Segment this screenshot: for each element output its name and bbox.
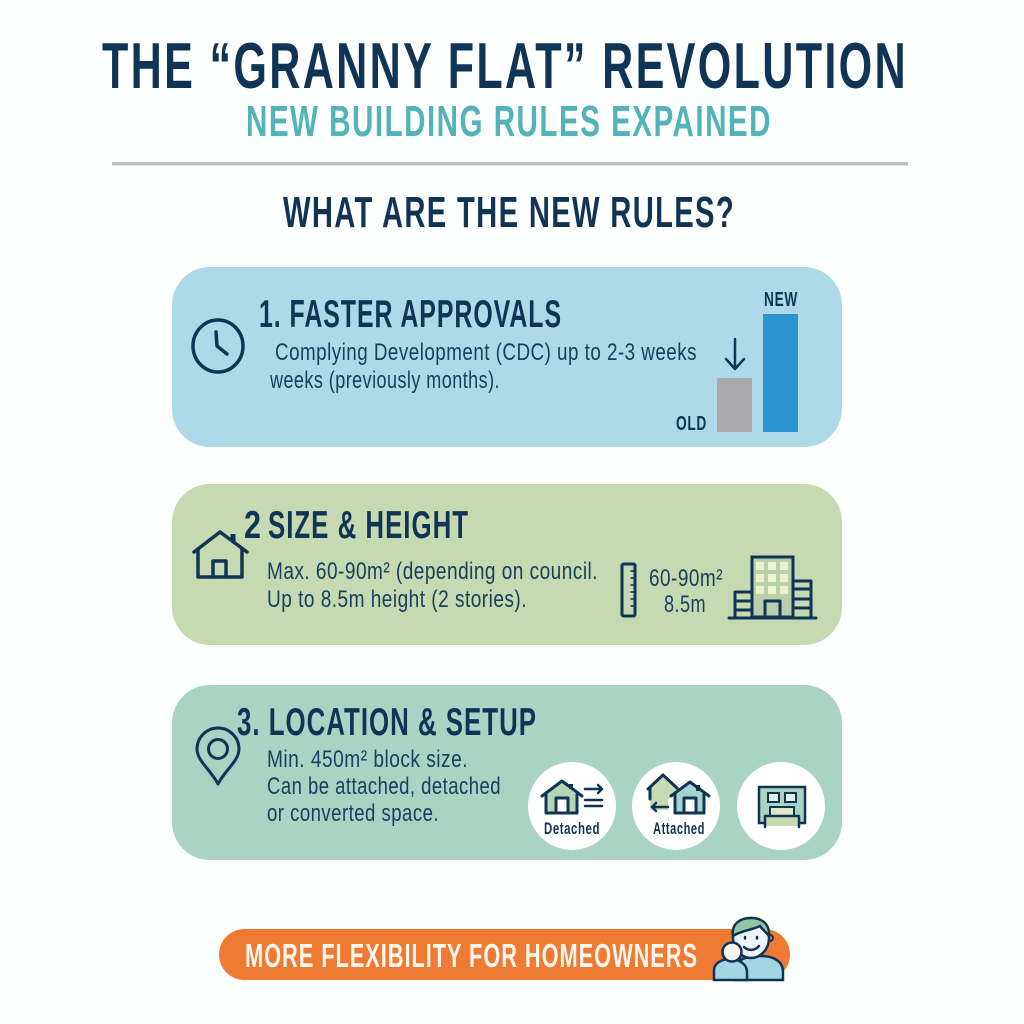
panel: faster approvals (172, 267, 842, 447)
icon: ruler (622, 564, 635, 616)
panel heading: size and height: SIZE & HEIGHT (268, 504, 469, 547)
banner text: MORE FLEXIBILITY FOR HOMEOWNERS (245, 937, 698, 974)
icon: building (729, 557, 816, 618)
panel heading: size and height: 2 (244, 504, 261, 547)
text: size figures (649, 565, 723, 618)
section heading: WHAT ARE THE NEW RULES? (283, 188, 735, 237)
icon: detached: Detached (544, 820, 600, 838)
icon: location pin (197, 728, 239, 784)
text: location description (267, 746, 501, 827)
text: approvals description: Complying Development (CDC) up to 2-3 weeks (275, 339, 697, 366)
icon: attached (632, 762, 720, 850)
text: size description: Up to 8.5m height (2 stories). (267, 586, 527, 613)
text: size figures: 60-90m² (649, 565, 723, 592)
panel: location and setup (172, 685, 842, 860)
bar chart: old vs new (676, 289, 798, 435)
icon: attached: Attached (653, 820, 705, 838)
panel heading: size and height (244, 504, 469, 547)
bar chart: old vs new: OLD (676, 413, 707, 435)
icon: clock (193, 320, 243, 372)
subtitle: NEW BUILDING RULES EXPAINED (246, 97, 772, 146)
icon: detached (528, 762, 616, 850)
icon: homeowner (714, 918, 783, 980)
text: size description: Max. 60-90m² (depending on council. (267, 558, 598, 585)
callout banner (219, 918, 790, 980)
text: location description: or converted space. (267, 800, 439, 827)
text: size figures: 8.5m (664, 591, 706, 618)
bar chart: old vs new: NEW (764, 289, 798, 311)
text: approvals description: weeks (previously months). (269, 367, 500, 394)
text: size description (267, 558, 598, 613)
panel heading: faster approvals: 1. FASTER APPROVALS (259, 293, 562, 336)
icon: house (194, 532, 247, 577)
text: location description: Can be attached, detached (267, 773, 501, 800)
panel: size and height (172, 484, 842, 645)
panel heading: location and setup: 3. LOCATION & SETUP (237, 701, 537, 744)
text: location description: Min. 450m² block size. (267, 746, 468, 773)
icon: converted room (737, 762, 825, 850)
text: approvals description (269, 339, 697, 394)
